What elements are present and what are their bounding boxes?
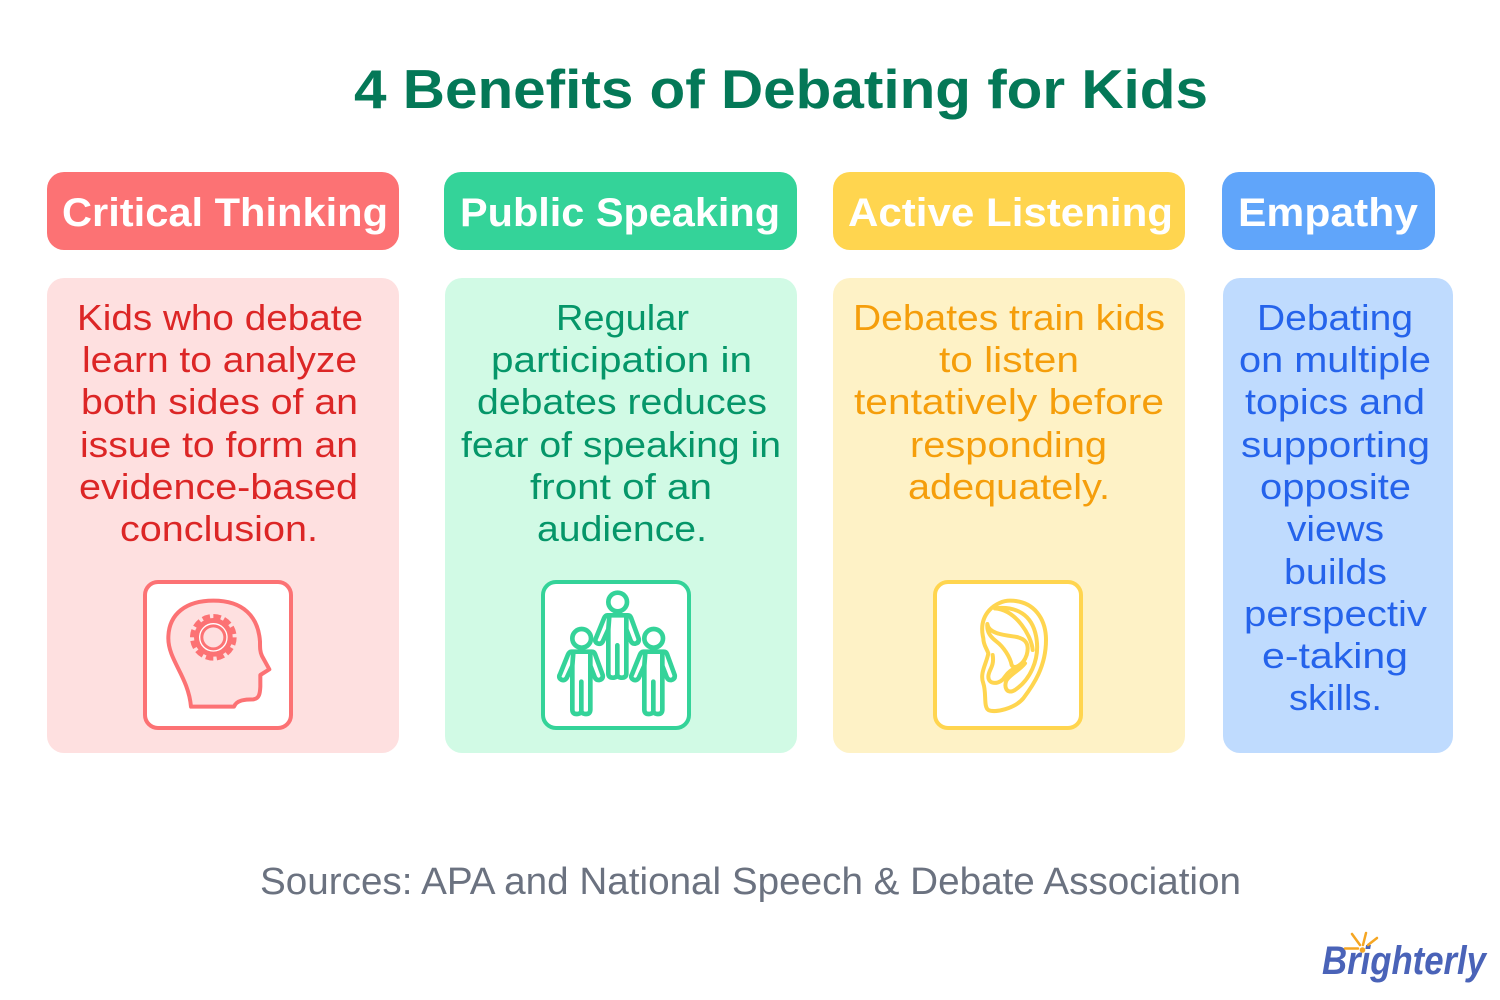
text block: critical thinking: conclusion.	[120, 508, 318, 549]
text block: empathy: e-taking	[1262, 635, 1408, 676]
heading: active listening	[833, 172, 1185, 250]
text block: critical thinking: evidence-based	[79, 466, 358, 507]
text block: public speaking: Regular	[556, 297, 689, 338]
title: 4 Benefits of Debating for Kids	[354, 58, 1208, 120]
icon: head with gear	[145, 582, 291, 728]
text block: empathy: topics and	[1245, 381, 1425, 422]
heading: empathy: Empathy	[1238, 191, 1419, 235]
text block: active listening: adequately.	[908, 466, 1110, 507]
text block: empathy: skills.	[1289, 677, 1382, 718]
text block: empathy: on multiple	[1239, 339, 1431, 380]
text block: critical thinking: issue to form an	[80, 424, 358, 465]
text block: empathy: supporting	[1241, 424, 1430, 465]
icon: ear	[935, 582, 1081, 728]
heading: critical thinking	[47, 172, 399, 250]
heading: public speaking	[444, 172, 797, 250]
text block: active listening	[853, 297, 1165, 507]
text block: public speaking: front of an	[530, 466, 712, 507]
card: critical thinking	[47, 278, 399, 753]
panel: critical thinking	[47, 172, 399, 753]
text block: critical thinking: Kids who debate	[77, 297, 363, 338]
text block: empathy: perspectiv	[1244, 593, 1427, 634]
text block: empathy: builds	[1284, 551, 1387, 592]
text block: empathy: opposite	[1260, 466, 1411, 507]
text block: active listening: responding	[910, 424, 1107, 465]
text block: critical thinking: learn to analyze	[82, 339, 357, 380]
text block: public speaking: audience.	[537, 508, 707, 549]
text block: critical thinking	[77, 297, 363, 549]
panel: empathy	[1222, 172, 1453, 753]
card: empathy	[1223, 278, 1453, 753]
panel: public speaking	[444, 172, 797, 753]
card: active listening	[833, 278, 1185, 753]
text block: empathy: views	[1287, 508, 1384, 549]
text block: active listening: to listen	[939, 339, 1079, 380]
text block: public speaking	[461, 297, 781, 549]
icon: sun rays	[1345, 933, 1377, 953]
card: public speaking	[445, 278, 797, 753]
text block: public speaking: debates reduces	[477, 381, 767, 422]
heading: empathy	[1222, 172, 1435, 250]
icon: three people	[543, 582, 689, 728]
source note: Sources: APA and National Speech & Debate Association	[260, 861, 1241, 903]
heading: public speaking: Public Speaking	[460, 191, 780, 235]
panel: active listening	[833, 172, 1185, 753]
text block: public speaking: fear of speaking in	[461, 424, 781, 465]
text block: public speaking: participation in	[491, 339, 752, 380]
text block: active listening: tentatively before	[854, 381, 1164, 422]
heading: active listening: Active Listening	[848, 191, 1173, 235]
text block: active listening: Debates train kids	[853, 297, 1165, 338]
heading: critical thinking: Critical Thinking	[62, 191, 388, 235]
text block: critical thinking: both sides of an	[81, 381, 358, 422]
text block: empathy	[1239, 297, 1431, 718]
text block: empathy: Debating	[1257, 297, 1413, 338]
